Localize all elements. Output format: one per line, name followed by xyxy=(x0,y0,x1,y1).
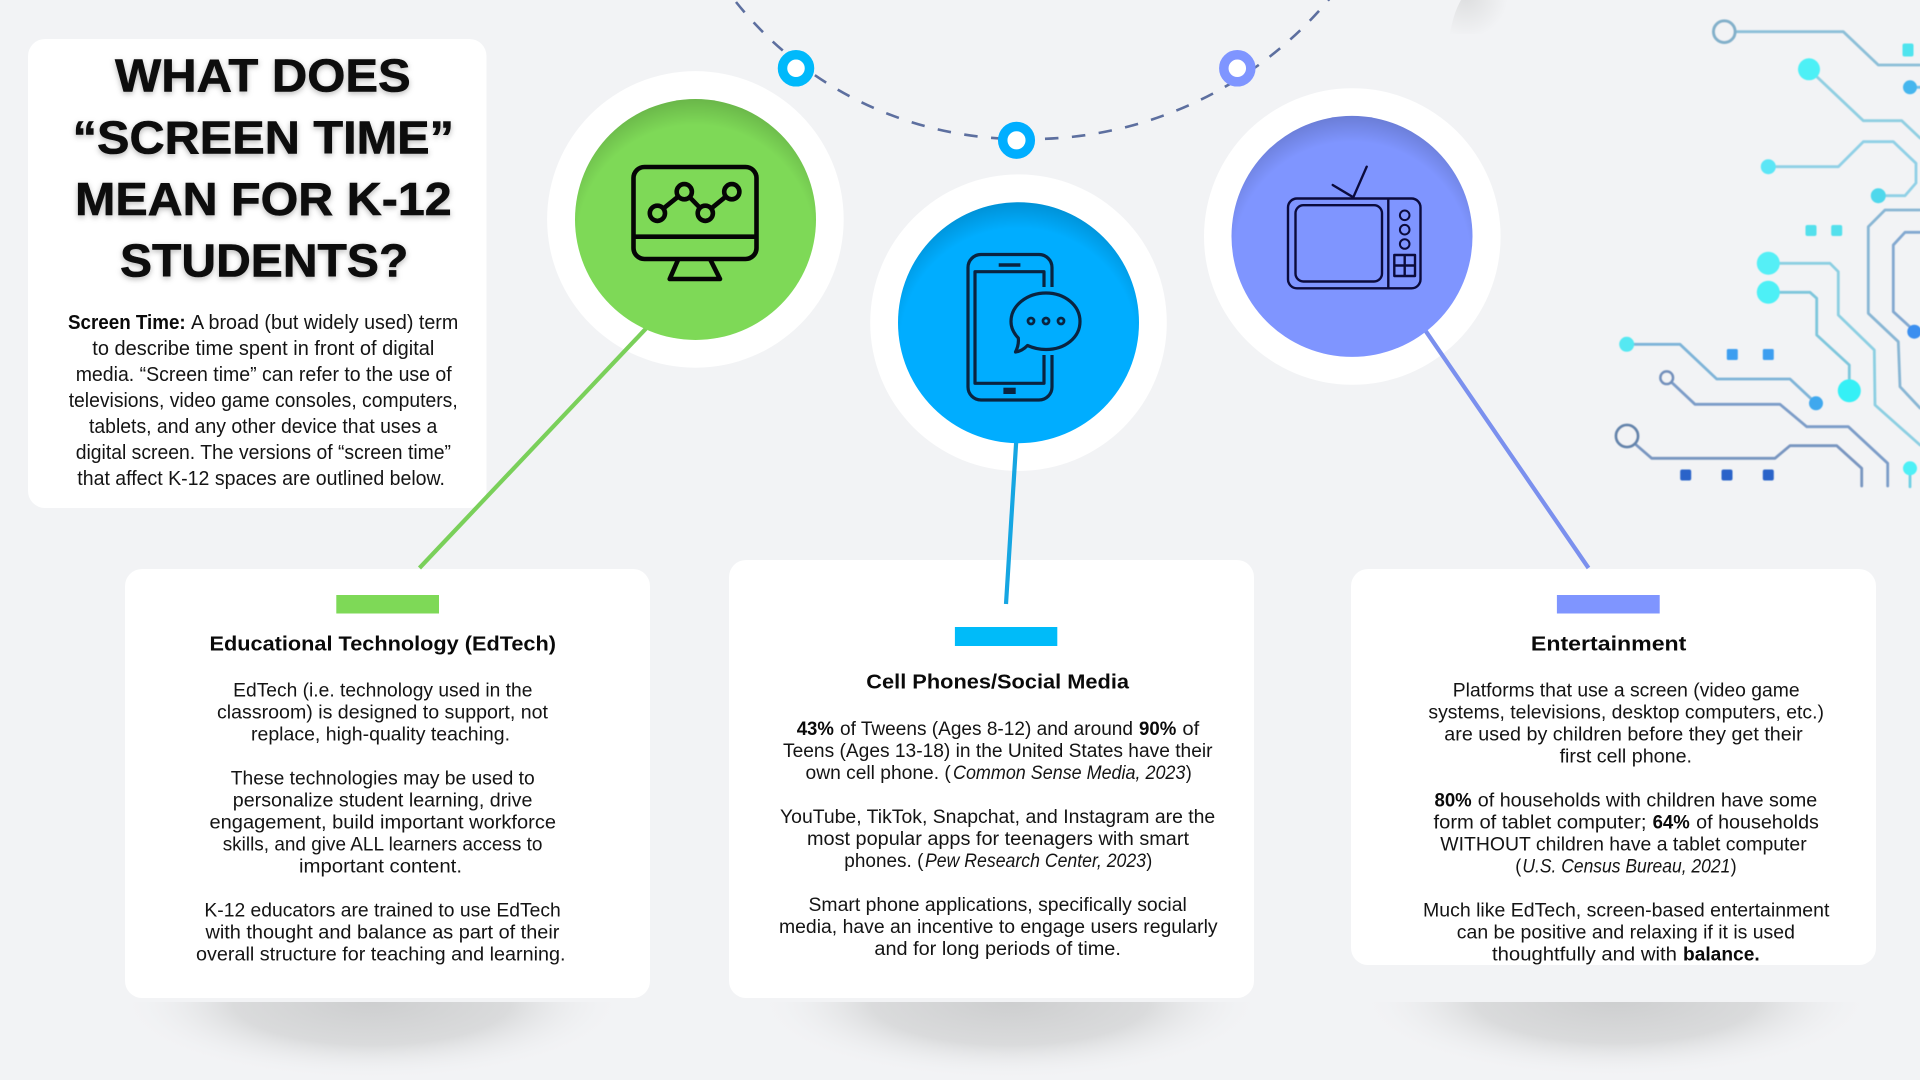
ring marker: blue topic xyxy=(1003,126,1030,154)
text: cell phones body: Common Sense Media, 2023 xyxy=(953,763,1186,784)
icon: monitor with line chart xyxy=(634,167,756,279)
text: entertainment body: are used by children before they get their xyxy=(1444,725,1803,746)
heading: EdTech: Educational Technology (EdTech) xyxy=(210,633,556,656)
definition text: tablets, and any other device that uses a xyxy=(89,415,438,438)
text: EdTech body: EdTech (i.e. technology used in the xyxy=(233,681,532,702)
text: entertainment body xyxy=(1423,681,1830,966)
text: EdTech body: K-12 educators are trained to use EdTech xyxy=(204,901,561,922)
badge: EdTech computer xyxy=(575,99,816,340)
text: cell phones body: ) xyxy=(1186,763,1192,784)
icon: smartphone with chat bubble xyxy=(968,254,1080,400)
text: cell phones body: of xyxy=(1182,719,1200,740)
shadow fragment at top edge xyxy=(1450,0,1510,34)
text: entertainment body: ) xyxy=(1731,857,1737,878)
ring marker: green topic xyxy=(782,55,810,82)
text: entertainment body: ( xyxy=(1515,857,1522,878)
text: cell phones body: own cell phone. ( xyxy=(806,763,951,784)
text: cell phones body: 43% xyxy=(797,719,834,740)
badge halo: blue xyxy=(870,174,1167,471)
definition text: media. “Screen time” can refer to the use of xyxy=(76,363,452,386)
text: entertainment body: form of tablet computer; xyxy=(1434,813,1646,834)
text: entertainment body: of households xyxy=(1696,813,1819,834)
accent bar: blue xyxy=(955,627,1057,646)
text: entertainment body: 64% xyxy=(1653,813,1690,834)
text: cell phones body: phones. ( xyxy=(844,851,924,872)
dashed arc connector xyxy=(736,0,1331,139)
title: STUDENTS? xyxy=(120,235,408,287)
text: entertainment body: can be positive and relaxing if it is used xyxy=(1457,923,1795,944)
connector: green xyxy=(420,328,646,568)
text: cell phones body: Pew Research Center, 2023 xyxy=(925,851,1146,872)
text: entertainment body: 80% xyxy=(1434,791,1472,812)
text: entertainment body: thoughtfully and with xyxy=(1492,945,1677,966)
title: WHAT DOES xyxy=(115,50,411,102)
title xyxy=(73,50,454,287)
text: entertainment body: balance. xyxy=(1683,945,1760,966)
text: entertainment body: of households with children have some xyxy=(1478,791,1817,812)
heading: cell phones: Cell Phones/Social Media xyxy=(866,670,1130,693)
title: “SCREEN TIME” xyxy=(73,111,454,163)
heading: entertainment: Entertainment xyxy=(1531,633,1687,656)
definition text: digital screen. The versions of “screen time” xyxy=(76,441,451,464)
text: cell phones body: YouTube, TikTok, Snapchat, and Instagram are the xyxy=(780,807,1215,828)
text: cell phones body: of Tweens (Ages 8-12) and around xyxy=(840,719,1133,740)
text: entertainment body: Much like EdTech, screen-based entertainment xyxy=(1423,901,1830,922)
text: EdTech body: overall structure for teaching and learning. xyxy=(196,945,566,966)
text: EdTech body: engagement, build important workforce xyxy=(210,813,556,834)
text: EdTech body: These technologies may be used to xyxy=(231,769,535,790)
ring marker: purple topic xyxy=(1224,55,1251,82)
text: EdTech body: skills, and give ALL learners access to xyxy=(223,835,542,856)
definition text: televisions, video game consoles, computers, xyxy=(69,389,458,412)
panel: cell phones card xyxy=(729,560,1254,998)
text: EdTech body: personalize student learning, drive xyxy=(233,791,532,812)
definition text: to describe time spent in front of digital xyxy=(92,337,434,360)
connector: blue xyxy=(1006,440,1016,604)
text: EdTech body: classroom) is designed to support, not xyxy=(217,703,549,724)
text: entertainment body: first cell phone. xyxy=(1560,747,1692,768)
badge: cell phone xyxy=(898,202,1139,443)
badge halo: purple xyxy=(1204,88,1501,385)
text: entertainment body: Platforms that use a screen (video game xyxy=(1453,681,1800,702)
text: EdTech body: important content. xyxy=(299,857,462,878)
connector: purple xyxy=(1425,330,1588,568)
definition text: A broad (but widely used) term xyxy=(191,311,458,334)
text: entertainment body: WITHOUT children have a tablet computer xyxy=(1440,835,1807,856)
badge: television xyxy=(1232,116,1472,357)
accent bar: purple xyxy=(1557,595,1660,614)
soft shadows beneath the cards xyxy=(185,1002,1806,1060)
accent bar: green xyxy=(336,595,439,614)
text: EdTech body xyxy=(196,681,566,966)
text: cell phones body xyxy=(779,719,1218,960)
text: EdTech body: replace, high-quality teaching. xyxy=(251,725,510,746)
definition text: that affect K-12 spaces are outlined below. xyxy=(77,467,445,490)
badge halo: green xyxy=(547,71,844,368)
text: cell phones body: Smart phone applications, specifically social xyxy=(808,895,1187,916)
panel: entertainment card xyxy=(1351,569,1876,966)
title: MEAN FOR K-12 xyxy=(75,173,452,225)
circuit board decoration xyxy=(1616,21,1920,487)
definition text xyxy=(68,311,458,490)
text: cell phones body: and for long periods of time. xyxy=(874,939,1121,960)
panel: intro definition xyxy=(28,39,486,508)
text: cell phones body: media, have an incentive to engage users regularly xyxy=(779,917,1218,938)
text: entertainment body: systems, televisions, desktop computers, etc.) xyxy=(1428,703,1824,724)
definition text: Screen Time: xyxy=(68,311,186,334)
text: entertainment body: U.S. Census Bureau, 2021 xyxy=(1522,857,1730,878)
panel: EdTech card xyxy=(125,569,650,998)
text: cell phones body: Teens (Ages 13-18) in the United States have their xyxy=(783,741,1213,762)
text: cell phones body: ) xyxy=(1146,851,1152,872)
text: cell phones body: most popular apps for teenagers with smart xyxy=(807,829,1190,850)
icon: retro television xyxy=(1288,167,1420,288)
text: EdTech body: with thought and balance as part of their xyxy=(204,923,560,944)
text: cell phones body: 90% xyxy=(1139,719,1176,740)
